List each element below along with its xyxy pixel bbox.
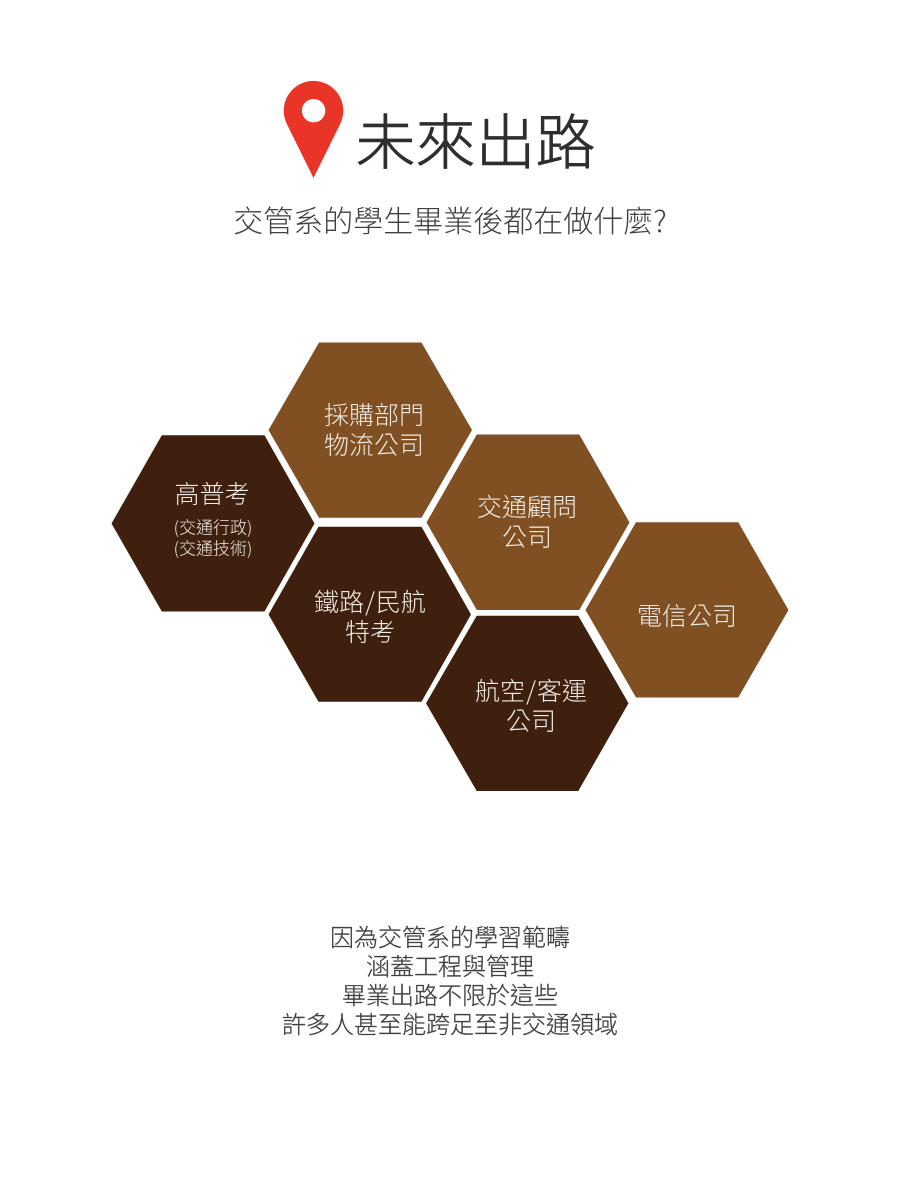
closing text block: 許多人甚至能跨足至非交通領域: [282, 1005, 618, 1040]
hexagon: 交通顧問公司: [426, 434, 630, 610]
hexagon: 高普考: 高普考: [174, 475, 250, 511]
closing text block: 因為交管系的學習範疇: [330, 918, 570, 953]
hexagon: 鐵路/民航特考: 特考: [345, 613, 395, 649]
closing text block: 涵蓋工程與管理: [366, 947, 534, 982]
hexagon: 鐵路/民航特考: 鐵路/民航: [314, 583, 426, 619]
hexagon: 航空/客運公司: 公司: [506, 702, 556, 738]
hexagon: 採購部門 物流公司: 採購部門: [324, 396, 424, 432]
hexagon chart: [112, 342, 788, 791]
subtitle: 交管系的學生畢業後都在做什麼?: [233, 197, 667, 241]
hexagon: 交通顧問公司: 公司: [502, 518, 552, 554]
hexagon: 電信公司: [586, 522, 788, 698]
hexagon: 航空/客運公司: [426, 616, 628, 791]
icon: location pin: [284, 81, 343, 178]
hexagon: 交通顧問公司: 交通顧問: [477, 488, 577, 524]
hexagon: 鐵路/民航特考: [268, 527, 471, 702]
hexagon: 航空/客運公司: 航空/客運: [475, 672, 587, 708]
hexagon: 電信公司: 電信公司: [637, 597, 737, 633]
hexagon: 採購部門 物流公司: [268, 342, 472, 518]
hexagon: 高普考: (交通技術): [174, 534, 252, 560]
hexagon: 採購部門 物流公司: 物流公司: [324, 426, 424, 462]
title: 未來出路: [356, 95, 596, 182]
hexagon: 高普考: (交通行政): [174, 514, 252, 538]
closing text block: [282, 918, 618, 1040]
closing text block: 畢業出路不限於這些: [342, 976, 558, 1011]
hexagon: 高普考: [112, 435, 314, 612]
